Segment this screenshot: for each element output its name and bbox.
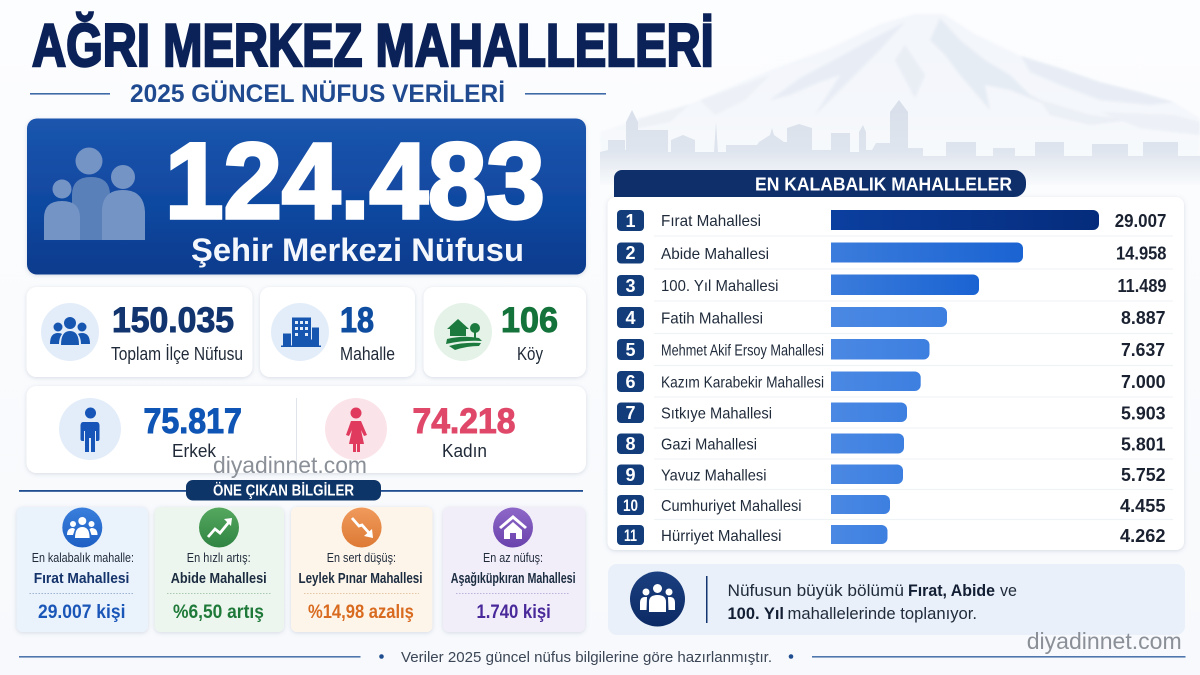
row 6: 6 [625, 372, 636, 392]
name: Aşağıküpkıran Mahallesi [451, 570, 576, 587]
row 8: 8 [625, 434, 636, 454]
row 8: Gazi Mahallesi [661, 436, 757, 454]
row 6: 7.000 [1121, 372, 1166, 392]
value: 150.035 [112, 301, 234, 340]
row 7: 7 [625, 403, 636, 423]
icon: people badge [630, 572, 685, 626]
row 2 [617, 242, 1166, 264]
name: Abide Mahallesi [171, 570, 267, 587]
icon: rising arrow [199, 508, 239, 548]
highlight card: most populated [16, 507, 148, 632]
row 10: Cumhuriyet Mahallesi [661, 498, 802, 515]
row 7 [617, 402, 1166, 424]
panel: gender breakdown [26, 386, 586, 473]
hero caption: Şehir Merkezi Nüfusu [191, 232, 524, 268]
row 2: 14.958 [1116, 244, 1166, 264]
caption: En hızlı artış: [187, 550, 251, 565]
row 9: Yavuz Mahallesi [661, 468, 766, 484]
row 5 [617, 339, 1165, 360]
footer note: Veriler 2025 güncel nüfus bilgilerine göre hazırlanmıştır. [401, 649, 772, 666]
callout text: Nüfusun büyük bölümü [728, 581, 904, 600]
value: women: 74.218 [412, 402, 515, 441]
stat card: village count [424, 287, 586, 377]
name: Leylek Pınar Mahallesi [298, 570, 422, 587]
row 8 [617, 434, 1166, 454]
ranking heading ribbon [614, 170, 1026, 197]
highlight card: fastest growth [155, 507, 284, 632]
icon: people [62, 508, 102, 548]
label: women: Kadın [442, 441, 487, 461]
caption: En kalabalık mahalle: [32, 550, 134, 565]
value: %6,50 artış [173, 601, 264, 622]
highlight card: least populated [443, 507, 585, 632]
row 4: Fatih Mahallesi [661, 310, 763, 328]
row 11 [617, 525, 1166, 546]
row 3: 11.489 [1118, 276, 1166, 296]
callout text [728, 581, 1017, 623]
panel: ranking table [608, 197, 1184, 550]
icon: village [434, 303, 492, 361]
row 6: Kazım Karabekir Mahallesi [661, 374, 824, 392]
icon: people group [44, 148, 145, 240]
callout text: ve [1000, 581, 1017, 600]
callout: population concentration [608, 564, 1185, 635]
icon: man [59, 398, 121, 460]
value: 106 [501, 302, 558, 340]
footer note [19, 649, 1186, 666]
row 4: 4 [625, 308, 636, 328]
row 11: 4.262 [1120, 526, 1166, 546]
row 1 [617, 210, 1166, 231]
caption: En az nüfuş: [483, 550, 543, 565]
watermark: diyadinnet.com [213, 452, 367, 478]
subtitle: 2025 GÜNCEL NÜFUS VERİLERİ [130, 79, 505, 108]
row 10 [617, 495, 1166, 516]
label: men: Erkek [172, 441, 217, 461]
ranking heading ribbon: EN KALABALIK MAHALLELER [755, 174, 1012, 194]
row 3: 3 [625, 276, 636, 296]
row 8: 5.801 [1121, 434, 1166, 454]
row 4 [617, 307, 1166, 328]
section heading: highlights: ÖNE ÇIKAN BİLGİLER [213, 480, 354, 500]
stat card: district population [26, 287, 252, 377]
row 7: 5.903 [1121, 404, 1166, 424]
icon: people [41, 303, 99, 361]
row 7: Sıtkıye Mahallesi [661, 406, 772, 422]
label: Mahalle [340, 344, 395, 364]
row 3 [617, 274, 1166, 296]
row 11: 11 [624, 526, 637, 545]
stat card: neighbourhood count [260, 287, 415, 377]
value: 1.740 kişi [476, 601, 551, 622]
row 2: Abide Mahallesi [661, 246, 769, 263]
watermark: diyadinnet.com [1027, 628, 1182, 654]
value: %14,98 azalış [308, 601, 414, 622]
row 5: 7.637 [1121, 340, 1165, 360]
row 5: Mehmet Akif Ersoy Mahallesi [661, 342, 824, 360]
value: men: 75.817 [144, 403, 242, 441]
row 6 [617, 371, 1166, 392]
callout text: Fırat, Abide [908, 581, 995, 600]
row 1: 29.007 [1115, 211, 1166, 231]
illustration: snowy mountain [600, 14, 1200, 185]
row 9: 5.752 [1121, 465, 1166, 485]
row 5: 5 [625, 340, 636, 360]
icon: buildings [271, 303, 329, 361]
row 1: Fırat Mahallesi [661, 213, 761, 230]
icon: woman [325, 398, 387, 460]
value: 29.007 kişi [38, 600, 125, 622]
name: Fırat Mahallesi [34, 570, 129, 587]
value: 18 [340, 300, 374, 339]
row 2: 2 [625, 243, 636, 263]
row 9 [617, 464, 1166, 485]
label: Toplam İlçe Nüfusu [111, 344, 243, 364]
callout text: mahallelerinde toplanıyor. [788, 604, 977, 623]
row 10: 4.455 [1120, 496, 1166, 516]
icon: falling arrow [342, 508, 382, 548]
row 1: 1 [625, 211, 636, 231]
highlight card: sharpest decline [291, 507, 432, 632]
section heading: highlights [19, 480, 583, 500]
illustration: city skyline [600, 100, 1200, 185]
big number: 124.483 [165, 121, 545, 241]
callout text: 100. Yıl [728, 604, 784, 623]
row 10: 10 [623, 496, 638, 515]
label: Köy [517, 344, 543, 364]
row 9: 9 [625, 465, 636, 485]
row 4: 8.887 [1121, 308, 1166, 328]
caption: En sert düşüş: [327, 550, 396, 565]
row 3: 100. Yıl Mahallesi [661, 278, 778, 295]
icon: house [493, 508, 533, 548]
title: AĞRI MERKEZ MAHALLELERİ [32, 13, 714, 79]
panel: city centre population [27, 118, 586, 274]
row 11: Hürriyet Mahallesi [661, 528, 782, 545]
